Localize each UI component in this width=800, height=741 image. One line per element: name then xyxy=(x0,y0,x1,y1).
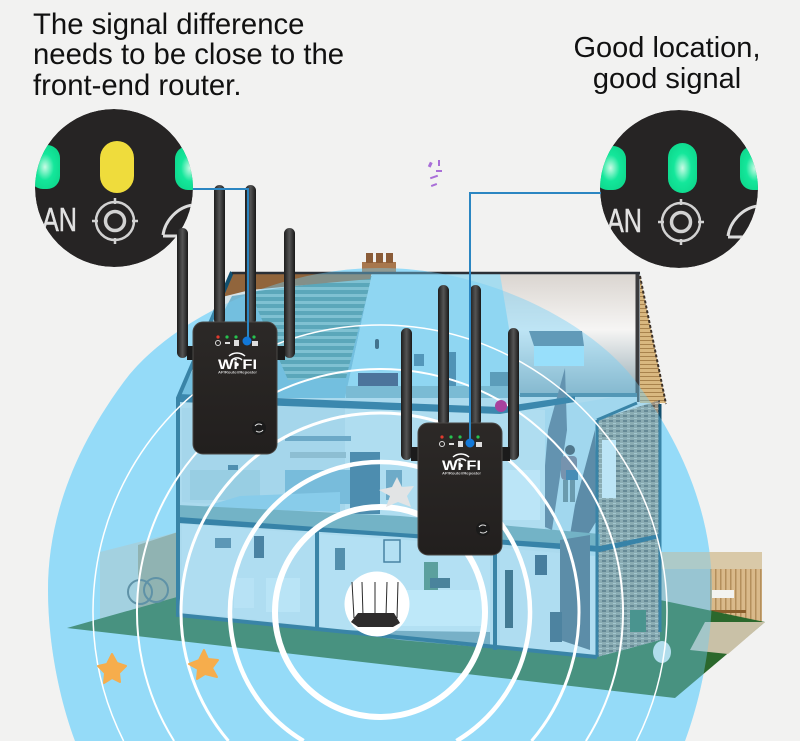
disk tint over house xyxy=(48,268,712,741)
scene illustration xyxy=(35,109,765,741)
star: orange left xyxy=(98,654,126,683)
star: grey xyxy=(379,477,414,507)
callout line left xyxy=(193,189,252,346)
heading left: front-end router. xyxy=(33,69,241,102)
attic furniture xyxy=(346,331,584,398)
person xyxy=(561,445,578,502)
back wall xyxy=(178,272,660,657)
house illustration xyxy=(67,253,765,698)
magnifier right: green LED: AN xyxy=(607,202,642,239)
callout line right xyxy=(466,193,601,448)
heading right: Good location, xyxy=(573,32,760,64)
star: orange right xyxy=(189,650,218,679)
fences and garden xyxy=(67,532,765,698)
repeater left: Wi FI xyxy=(218,356,257,372)
heading left: needs to be close to the xyxy=(33,38,344,71)
purple sparkle xyxy=(428,160,442,187)
repeater left xyxy=(177,185,295,454)
magnifier left: yellow LED xyxy=(30,109,205,267)
signal disk xyxy=(48,268,712,741)
garden details xyxy=(128,578,671,663)
repeater right: Wi FI xyxy=(442,457,481,473)
middle floor rooms xyxy=(182,404,545,530)
heading right xyxy=(573,32,760,95)
magnifier right: green LED xyxy=(595,110,770,268)
router in white spot xyxy=(344,572,410,636)
slabs xyxy=(178,394,575,414)
brick side wall xyxy=(597,400,660,657)
heading left: The signal difference xyxy=(33,8,304,41)
heading left xyxy=(33,8,344,102)
attic right room xyxy=(345,274,637,398)
heading right: good signal xyxy=(593,63,741,95)
chimney xyxy=(362,253,396,272)
house frame xyxy=(178,272,660,657)
repeater left: AP/Router/Repeater xyxy=(218,370,257,374)
ground floor rooms xyxy=(182,524,595,655)
tan gable wall xyxy=(640,276,666,403)
signal rings xyxy=(93,325,667,741)
stairwell xyxy=(520,368,637,560)
magenta dot xyxy=(495,400,507,412)
attic teal roof xyxy=(178,276,372,398)
magnifier left: yellow LED: AN xyxy=(42,201,77,238)
repeater right: AP/Router/Repeater xyxy=(442,470,481,476)
repeater right xyxy=(401,285,519,555)
